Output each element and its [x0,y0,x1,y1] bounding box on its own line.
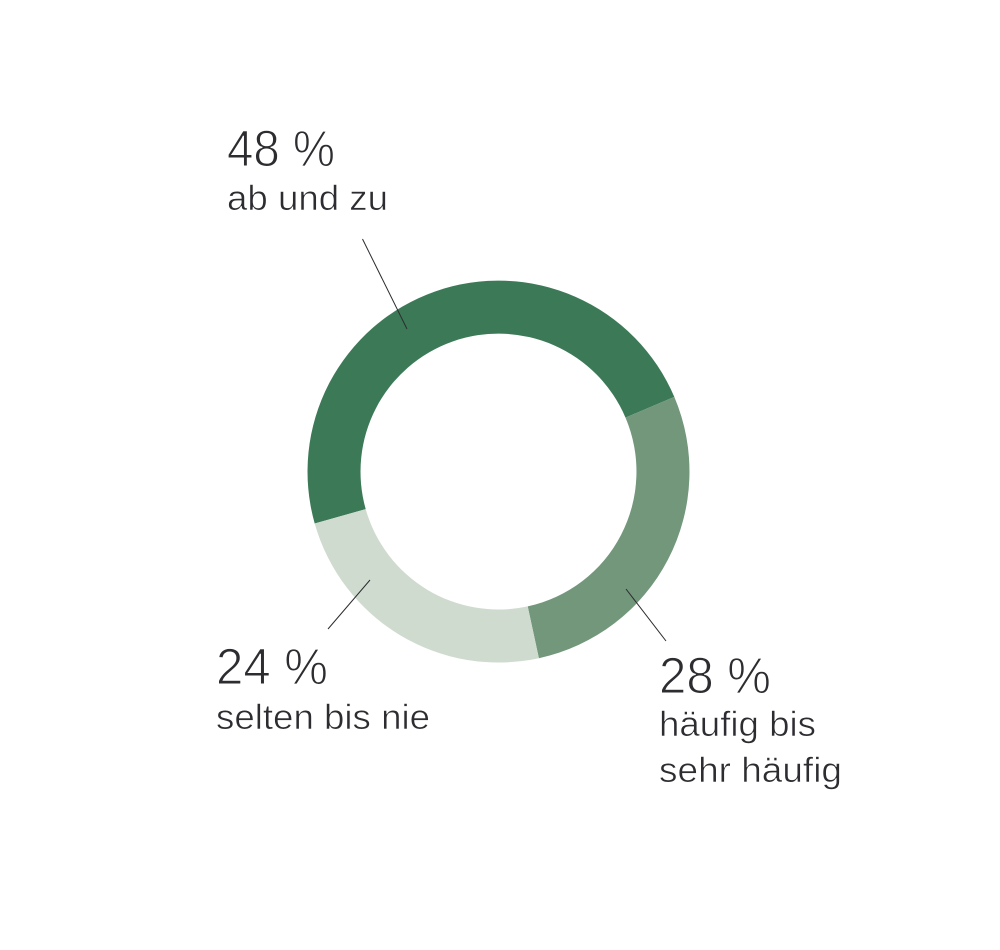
label: 24 % selten bis nie [216,638,430,737]
leader line: 24 % [328,580,370,629]
leader line: 28 % [626,589,666,641]
label: 24 % selten bis nie: selten bis nie [216,698,430,737]
label: 28 % häufig bis sehr häufig: 28 % [659,647,771,704]
label: 48 % ab und zu: 48 % [227,120,335,177]
label: 48 % ab und zu: ab und zu [227,179,388,218]
label: 28 % häufig bis sehr häufig [659,647,842,790]
segment: 48 % ab und zu [308,281,674,524]
leader line: 48 % [362,239,407,329]
label: 28 % häufig bis sehr häufig: sehr häufig [659,751,842,790]
label: 28 % häufig bis sehr häufig: häufig bis [659,705,816,744]
segment: 28 % häufig bis sehr häufig [528,397,689,658]
label: 48 % ab und zu [227,120,388,218]
label: 24 % selten bis nie: 24 % [216,638,328,695]
donut ring [308,281,689,663]
segment: 24 % selten bis nie [315,509,539,663]
